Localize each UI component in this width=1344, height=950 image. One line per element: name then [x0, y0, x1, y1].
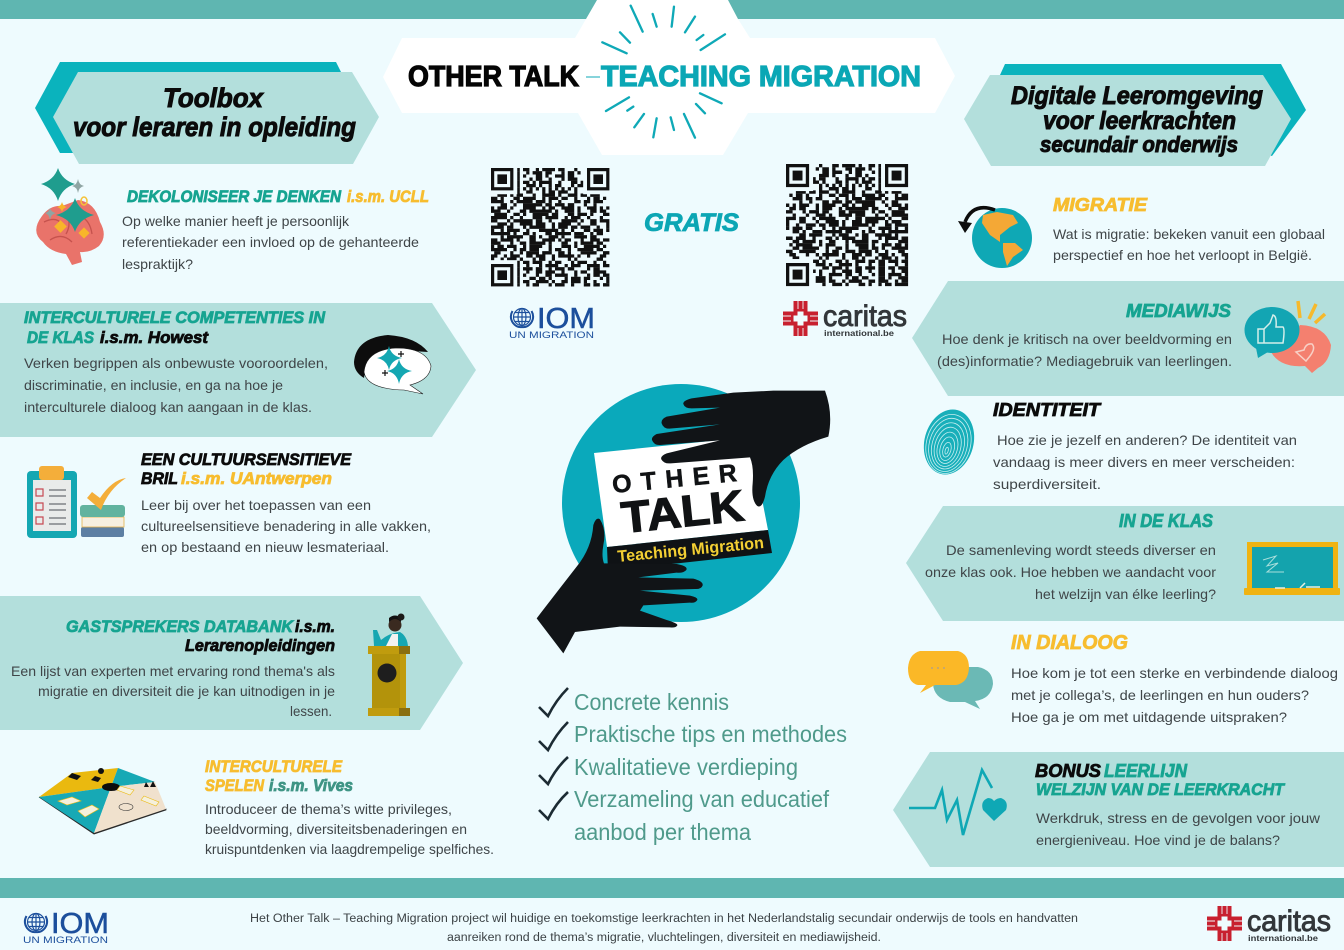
footer logo: IOM: [23, 908, 109, 946]
text block: onze klas ook. Hoe hebben we aandacht voor: [925, 564, 1216, 580]
title banner: [383, 0, 955, 155]
icon: chalkboard: [1244, 542, 1340, 595]
panel: digitale leeromgeving heading: [964, 64, 1306, 166]
bottom bar: [0, 878, 1344, 898]
text block: De samenleving wordt steeds diverser en: [946, 542, 1216, 558]
title text: [408, 61, 921, 93]
top bar: [0, 0, 1344, 19]
heading: [24, 309, 326, 347]
panel: interculturele competenties: [0, 303, 476, 437]
sunburst: [602, 6, 725, 138]
heading: [66, 618, 335, 655]
heading: [205, 758, 353, 795]
footer logo: Caritas: international.be: [1248, 933, 1318, 943]
logo: Caritas: caritas: [823, 300, 907, 333]
panel: bonus leerlijn: [893, 752, 1344, 867]
panel: interculturele spelen: [39, 758, 494, 857]
logo: IOM: IOM: [537, 303, 595, 335]
heading: WELZIJN VAN DE LEERKRACHT: [1036, 781, 1286, 799]
text block: en op bestaand en nieuw lesmateriaal.: [141, 539, 389, 555]
panel: mediawijs: [912, 281, 1344, 396]
text block: Op welke manier heeft je persoonlijk: [122, 213, 350, 229]
heading: i.s.m.: [295, 618, 335, 636]
text block: discriminatie, en inclusie, en ga na hoe je: [24, 377, 283, 393]
heading: DEKOLONISEER JE DENKEN: [127, 188, 342, 206]
footer logo: IOM: IOM: [51, 908, 109, 940]
panel: digitale leeromgeving heading: Digitale Leeromgeving: [1011, 82, 1263, 110]
QR code: Caritas: [785, 163, 909, 287]
text block: Een lijst van experten met ervaring rond thema's als: [11, 663, 335, 679]
text block: [1011, 665, 1338, 725]
text block: kruispuntdenken via laagdrempelige spelfiches.: [205, 841, 494, 857]
text block: Werkdruk, stress en de gevolgen voor jouw: [1036, 810, 1321, 826]
heading: BONUS: [1035, 761, 1101, 781]
logo text: [611, 459, 765, 566]
text block: referentiekader een invloed op de gehanteerde: [122, 234, 419, 250]
text block: [141, 497, 431, 555]
heading: Lerarenopleidingen: [185, 637, 335, 655]
heading: EEN CULTUURSENSITIEVE: [141, 451, 352, 469]
text block: [925, 542, 1216, 602]
heading: i.s.m. Vives: [269, 777, 353, 795]
heading: SPELEN: [205, 777, 265, 795]
item: praktische tips: Praktische tips en methodes: [574, 721, 847, 747]
logo: Caritas: [783, 300, 907, 338]
heading: i.s.m. UCLL: [347, 188, 429, 206]
logo: Caritas: international.be: [824, 328, 894, 338]
heading: MEDIAWIJS: [1126, 301, 1231, 321]
footer text: Het Other Talk – Teaching Migration project wil huidige en toekomstige leerkrachten in het Nederlandstalig secundair onderwijs de tools en handvatten: [250, 913, 1078, 925]
icon: fingerprint: [917, 404, 981, 480]
text block: superdiversiteit.: [993, 476, 1101, 492]
text block: beeldvorming, diversiteitsbenaderingen en: [205, 821, 467, 837]
icon: clipboard and books: [27, 466, 126, 538]
heading: IN DIALOOG: [1011, 632, 1128, 654]
text block: Hoe kom je tot een sterke en verbindende dialoog: [1011, 665, 1338, 681]
text block: perspectief en hoe het verloopt in België.: [1053, 247, 1312, 263]
text block: [1053, 226, 1325, 263]
text block: [24, 355, 328, 415]
title text: OTHER TALK: [408, 61, 579, 93]
text block: Verken begrippen als onbewuste vooroordelen,: [24, 355, 328, 371]
text block: Hoe zie je jezelf en anderen? De identiteit van: [997, 432, 1297, 448]
heading: [141, 451, 352, 488]
text block: [993, 432, 1297, 492]
footer logo: Caritas: [1207, 905, 1331, 943]
text block: het welzijn van élke leerling?: [1035, 586, 1216, 602]
text block: Introduceer de thema’s witte privileges,: [205, 801, 452, 817]
item: verzameling: [539, 786, 830, 845]
text block: [122, 213, 419, 272]
logo: IOM: [509, 303, 595, 341]
text block: cultureelsensitieve benadering in alle vakken,: [141, 518, 431, 534]
heading: INTERCULTURELE COMPETENTIES IN: [24, 309, 326, 327]
panel: digitale leeromgeving heading: secundair onderwijs: [1040, 132, 1238, 157]
panel: een cultuursensitieve bril: [27, 451, 431, 555]
text block: Hoe denk je kritisch na over beeldvorming en: [942, 331, 1232, 347]
icon: dialogue bubbles: [908, 651, 993, 709]
text block: [1036, 810, 1321, 848]
text block: Wat is migratie: bekeken vanuit een globaal: [1053, 226, 1325, 242]
heading: BRIL: [141, 470, 178, 488]
text block: (des)informatie? Mediagebruik van leerlingen.: [937, 353, 1232, 369]
panel: toolbox heading: Toolbox: [163, 83, 264, 113]
heading: LEERLIJN: [1104, 761, 1188, 781]
item: kwalitatieve verdieping: Kwalitatieve verdieping: [574, 754, 798, 780]
heading: INTERCULTURELE: [205, 758, 343, 776]
text block: lessen.: [290, 703, 332, 719]
text block: Leer bij over het toepassen van een: [141, 497, 371, 513]
logo text: OTHER: [611, 459, 738, 499]
white card: [594, 437, 768, 547]
text block: Hoe ga je om met uitdagende uitspraken?: [1011, 709, 1287, 725]
label: gratis: GRATIS: [644, 209, 739, 237]
heading: IDENTITEIT: [993, 400, 1102, 420]
logo text: Teaching Migration: [617, 534, 765, 566]
text block: interculturele dialoog kan aangaan in de klas.: [24, 399, 312, 415]
item: verzameling: aanbod per thema: [574, 819, 751, 845]
item: concrete kennis: Concrete kennis: [574, 689, 729, 715]
checklist: [539, 688, 847, 845]
QR code: IOM: [490, 167, 610, 287]
text block: vandaag is meer divers en meer verscheiden:: [993, 454, 1295, 470]
panel: in dialoog: [908, 632, 1338, 725]
text block: met je collega’s, de leerlingen en hun ouders?: [1011, 687, 1309, 703]
icon: speaker at podium: [368, 614, 410, 716]
icon: like and heart bubbles: [1244, 301, 1331, 373]
upper hand: [652, 391, 830, 506]
text block: [205, 801, 494, 857]
panel: migratie: [958, 195, 1325, 268]
icon: speech bubble with sparkles: [354, 335, 431, 394]
icon: board game: [39, 768, 166, 834]
icon: brain with sparkles: [36, 168, 104, 265]
panel: digitale leeromgeving heading: voor leerkrachten: [1043, 107, 1236, 135]
footer text: aanreiken rond de thema’s migratie, vluchtelingen, diversiteit en mediawijsheid.: [447, 932, 881, 944]
item: verzameling: Verzameling van educatief: [574, 786, 830, 812]
heading: GASTSPREKERS DATABANK: [66, 618, 294, 636]
title text: TEACHING MIGRATION: [601, 61, 921, 93]
heading: i.s.m. UAntwerpen: [181, 470, 332, 488]
footer logo: IOM: UN MIGRATION: [23, 935, 108, 946]
heading: [1035, 761, 1286, 799]
text block: [11, 663, 335, 719]
footer logo: Caritas: caritas: [1247, 905, 1331, 938]
text block: migratie en diversiteit die je kan uitnodigen in je: [38, 683, 335, 699]
text block: lespraktijk?: [122, 256, 193, 272]
central logo: Other Talk hands: [537, 384, 830, 653]
panel: gastsprekers databank: [0, 596, 463, 730]
lower hand: [537, 519, 703, 653]
heading: IN DE KLAS: [1119, 511, 1213, 531]
logo: IOM: UN MIGRATION: [509, 330, 594, 341]
icon: globe with arrow: [958, 208, 1032, 268]
panel: identiteit: [917, 400, 1297, 492]
heading: i.s.m. Howest: [100, 329, 210, 347]
panel: toolbox heading: [35, 62, 379, 164]
panel: in de klas: [906, 506, 1344, 621]
text block: energieniveau. Hoe vind je de balans?: [1036, 832, 1280, 848]
black strip: [607, 530, 772, 571]
text block: [937, 331, 1232, 369]
logo text: TALK: [619, 481, 747, 543]
icon: heartbeat: [909, 770, 1007, 835]
panel: toolbox heading: voor leraren in opleiding: [73, 112, 356, 142]
panel: dekoloniseer je denken: [36, 168, 429, 272]
footer text: [250, 913, 1078, 944]
heading: DE KLAS: [27, 329, 94, 347]
heading: MIGRATIE: [1053, 195, 1148, 215]
